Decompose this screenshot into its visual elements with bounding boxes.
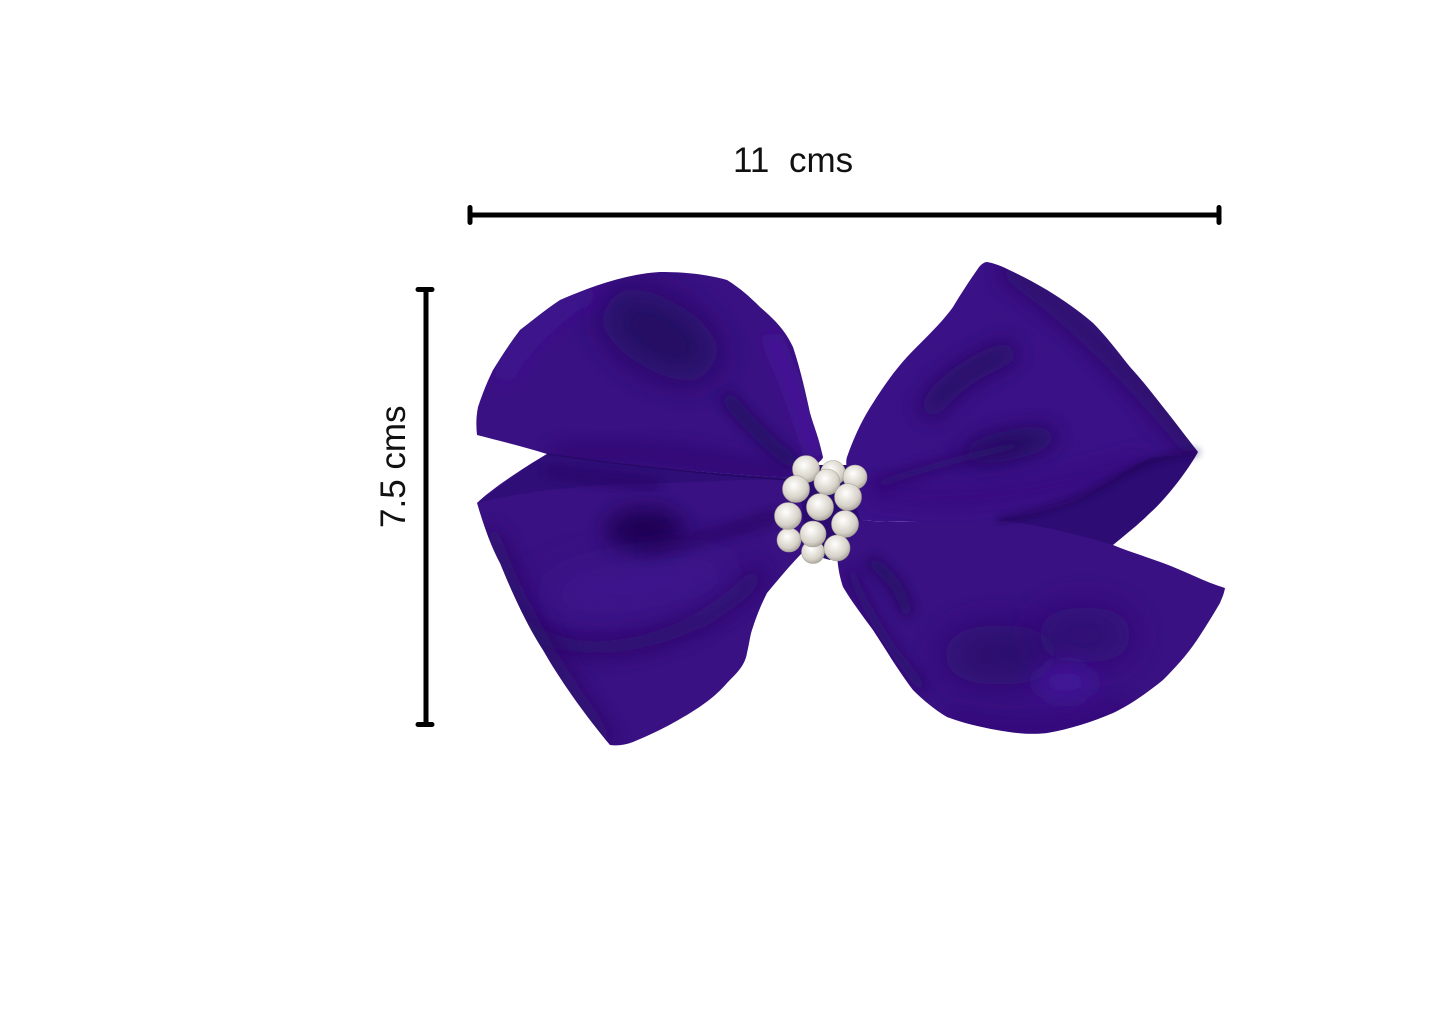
height label: 7.5 cms bbox=[374, 405, 413, 528]
height dimension line bbox=[416, 287, 434, 727]
fold shadow right bbox=[997, 452, 1198, 520]
pearl cluster bbox=[774, 456, 867, 564]
purple satin bow bbox=[460, 258, 1230, 760]
bow loop: upper left bbox=[470, 265, 830, 485]
width dimension line bbox=[468, 205, 1222, 225]
fold line bbox=[547, 454, 790, 480]
bow loop: upper right bbox=[840, 258, 1205, 528]
front pearls bbox=[792, 456, 820, 482]
width label: 11 bbox=[733, 141, 769, 180]
back fold right bbox=[930, 450, 1198, 545]
width label: cms bbox=[789, 141, 853, 180]
knot base behind pearls bbox=[790, 465, 865, 560]
bow product dimension infographic bbox=[380, 148, 1225, 746]
bow loop: lower left bbox=[477, 454, 804, 746]
bow loop: lower right bbox=[838, 520, 1225, 734]
back pearls bbox=[820, 460, 846, 486]
